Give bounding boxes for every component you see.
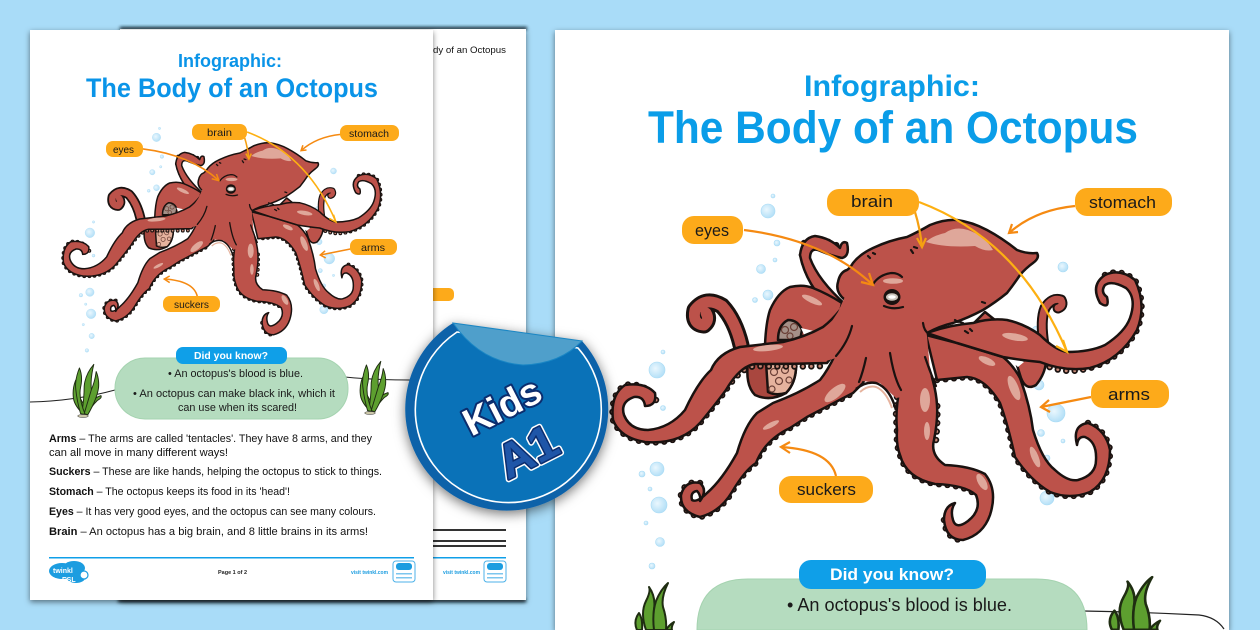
- small did you know box: • An octopus can make black ink, which it: [133, 388, 335, 400]
- small body text: [49, 433, 382, 538]
- small footer: twinkl: [53, 568, 73, 575]
- seabed line: [1083, 611, 1224, 629]
- back page: second sheet: dy of an Octopus: [433, 45, 507, 55]
- small labels: arms: [361, 242, 385, 254]
- badge text: A1: A1: [489, 415, 567, 490]
- large page: [555, 30, 1229, 630]
- small body text: Brain – An octopus has a big brain, and 8 little brains in its arms!: [49, 526, 368, 538]
- small did you know box: [115, 347, 348, 419]
- small footer: Page 1 of 2: [218, 570, 247, 576]
- did you know box: Did you know?: [830, 565, 954, 584]
- badge: Kids A1: [405, 323, 608, 511]
- small body text: can all move in many different ways!: [49, 447, 228, 459]
- small footer: visit twinkl.com: [351, 570, 388, 576]
- small labels: suckers: [174, 299, 209, 311]
- small labels: brain: [207, 127, 232, 139]
- label: eyes: eyes: [695, 221, 729, 240]
- small labels: stomach: [349, 128, 389, 140]
- label: suckers: [779, 476, 873, 503]
- small body text: Suckers – These are like hands, helping the octopus to stick to things.: [49, 466, 382, 478]
- arrow: stomach: [1009, 206, 1075, 233]
- seaweed left: [635, 583, 674, 630]
- large title: Infographic:: [804, 70, 980, 103]
- label: brain: [827, 189, 919, 216]
- small body text: Eyes – It has very good eyes, and the octopus can see many colours.: [49, 506, 376, 518]
- label: stomach: [1075, 188, 1172, 216]
- large title: [648, 70, 1138, 153]
- did you know box: [697, 560, 1087, 630]
- arrow: eyes: [744, 230, 873, 285]
- small body text: Stomach – The octopus keeps its food in its 'head'!: [49, 486, 290, 498]
- small title: [86, 51, 378, 103]
- small footer: [49, 557, 415, 584]
- label: eyes: [682, 216, 743, 244]
- small footer: ESL: [62, 577, 76, 584]
- badge disc: [405, 323, 608, 511]
- small did you know box: Did you know?: [194, 350, 268, 362]
- back page: second sheet: [118, 27, 527, 602]
- small body text: Arms – The arms are called 'tentacles'. They have 8 arms, and they: [49, 433, 372, 445]
- large page sheet: [555, 30, 1229, 630]
- small labels: eyes: [113, 144, 134, 156]
- octopus illustration: [612, 194, 1142, 569]
- small title: The Body of an Octopus: [86, 73, 378, 103]
- page preview: small worksheet: [30, 30, 433, 600]
- label: brain: brain: [851, 192, 893, 211]
- badge text: A1: A1: [489, 415, 567, 490]
- label: suckers: suckers: [797, 480, 856, 499]
- small octopus illustration: [63, 127, 381, 352]
- arrow: brain to head: [915, 212, 926, 247]
- arrow: arms: [1041, 397, 1091, 412]
- label: arms: arms: [1108, 385, 1150, 404]
- small title: Infographic:: [178, 51, 282, 71]
- small labels: [106, 124, 399, 312]
- badge curled corner: [453, 323, 582, 365]
- seaweed right: [1110, 577, 1160, 630]
- small did you know box: • An octopus's blood is blue.: [168, 368, 303, 380]
- large title: The Body of an Octopus: [648, 102, 1138, 153]
- label: arms: [1091, 380, 1169, 408]
- small page sheet: [30, 30, 433, 600]
- badge text: Kids: Kids: [456, 370, 549, 445]
- did you know box: • An octopus's blood is blue.: [787, 595, 1012, 615]
- arrow: suckers: [781, 442, 836, 476]
- small arrows: [142, 132, 350, 296]
- small seaweed right: [360, 361, 388, 414]
- small seabed lines: [30, 377, 410, 402]
- small did you know box: can use when its scared!: [178, 402, 297, 414]
- label: stomach: stomach: [1089, 193, 1156, 212]
- small seaweed left: [73, 364, 101, 418]
- back page: second sheet: visit twinkl.com: [443, 570, 480, 576]
- arrow: brain to arm: [919, 202, 1067, 352]
